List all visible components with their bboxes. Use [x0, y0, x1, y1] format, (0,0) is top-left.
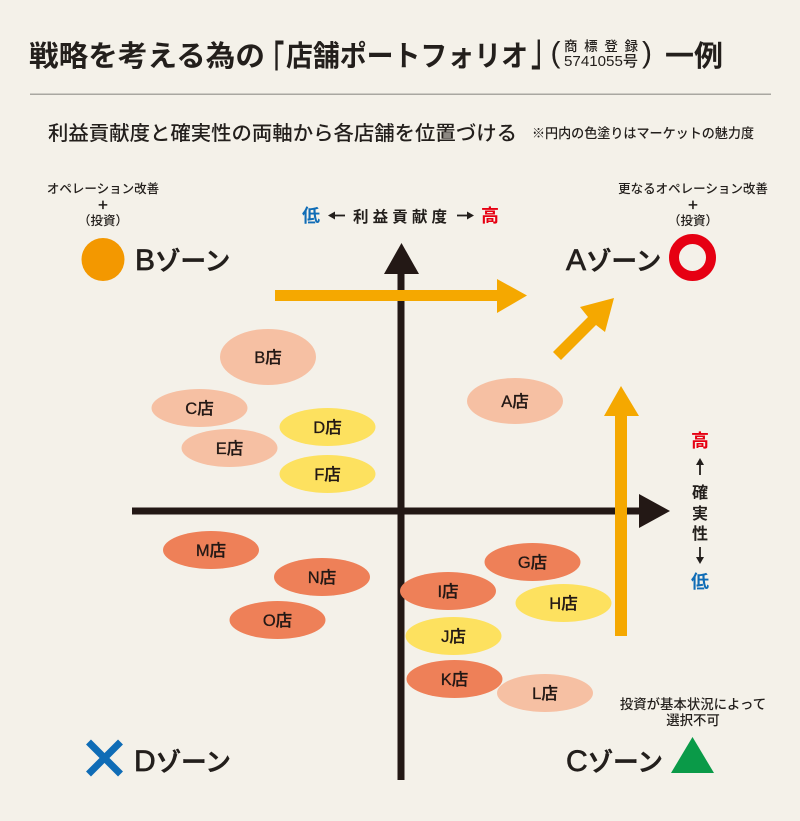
label: certainty axis: 性 — [692, 524, 708, 543]
title: 「 — [259, 38, 284, 90]
label: certainty axis: 低 — [691, 572, 709, 592]
heading: A zone: Aゾーン — [566, 244, 661, 277]
label: profit axis — [302, 206, 499, 226]
store: M: M店 — [196, 541, 226, 560]
title — [29, 23, 723, 90]
caption: A zone: （投資） — [668, 214, 718, 228]
caption: B zone — [47, 181, 159, 228]
label: certainty axis — [691, 431, 709, 592]
note: ※円内の色塗りはマーケットの魅力度 — [532, 125, 754, 141]
title: 商標登録 — [564, 38, 638, 54]
caption: B zone: オペレーション改善 — [47, 181, 159, 196]
label: certainty axis: 高 — [691, 431, 709, 451]
store: G: G店 — [518, 553, 547, 572]
title: 一例 — [665, 40, 723, 73]
store: K: K店 — [441, 670, 468, 689]
store: A — [467, 378, 563, 424]
store: B: B店 — [254, 348, 282, 367]
label: certainty axis: 確 — [692, 483, 708, 502]
caption: B zone: + — [98, 196, 108, 214]
heading: D zone: Dゾーン — [134, 745, 231, 778]
store: O — [230, 601, 326, 639]
arrow: up — [604, 386, 639, 636]
caption: A zone: 更なるオペレーション改善 — [618, 181, 768, 196]
label: profit axis: 利益貢献度 — [353, 207, 447, 226]
caption: B zone: （投資） — [78, 214, 128, 228]
vertical axis — [384, 243, 419, 780]
store: B — [220, 329, 316, 385]
caption: C zone: 投資が基本状況によって — [620, 696, 766, 712]
store: N: N店 — [308, 568, 336, 587]
store: G — [484, 543, 580, 581]
icon: C zone triangle — [671, 737, 714, 773]
store: A: A店 — [501, 392, 529, 411]
store: F: F店 — [314, 465, 341, 484]
heading: C zone: Cゾーン — [566, 745, 663, 778]
title: 」 — [531, 23, 556, 75]
subtitle: 利益貢献度と確実性の両軸から各店舗を位置づける — [48, 122, 517, 145]
store: H: H店 — [549, 594, 578, 613]
caption: C zone — [620, 696, 766, 728]
store: N — [274, 558, 370, 596]
title: 5741055号 — [564, 53, 638, 70]
store: I — [400, 572, 496, 610]
caption: A zone: + — [688, 196, 698, 214]
store: J: J店 — [441, 627, 466, 646]
icon: B zone circle — [82, 238, 124, 281]
label: profit axis: 高 — [481, 206, 499, 226]
store: C: C店 — [185, 399, 214, 418]
title: 戦略を考える為の — [29, 40, 265, 73]
store: O: O店 — [263, 611, 292, 630]
store: M — [163, 531, 259, 569]
store: E: E店 — [216, 439, 243, 458]
store: D: D店 — [313, 418, 342, 437]
arrow: diagonal — [553, 298, 614, 360]
store: E — [182, 429, 278, 467]
caption: A zone — [618, 181, 768, 228]
icon: D zone cross — [88, 742, 120, 774]
store: J — [406, 617, 502, 655]
heading: B zone: Bゾーン — [135, 244, 230, 277]
store: K — [406, 660, 502, 698]
store: D — [280, 408, 376, 446]
title: ( — [550, 36, 560, 70]
store: L — [497, 674, 593, 712]
icon: A zone ring — [674, 239, 711, 276]
horizontal axis — [132, 494, 670, 528]
arrow: right — [275, 279, 527, 313]
store: F — [280, 455, 376, 493]
caption: C zone: 選択不可 — [666, 713, 720, 728]
store: I: I店 — [437, 582, 459, 601]
label: profit axis: 低 — [302, 206, 320, 226]
title: ) — [642, 36, 652, 70]
store: C — [152, 389, 248, 427]
title: 店舗ポートフォリオ — [286, 40, 528, 73]
store: L: L店 — [532, 684, 558, 703]
label: certainty axis: 実 — [692, 505, 708, 523]
store: H — [516, 584, 612, 622]
